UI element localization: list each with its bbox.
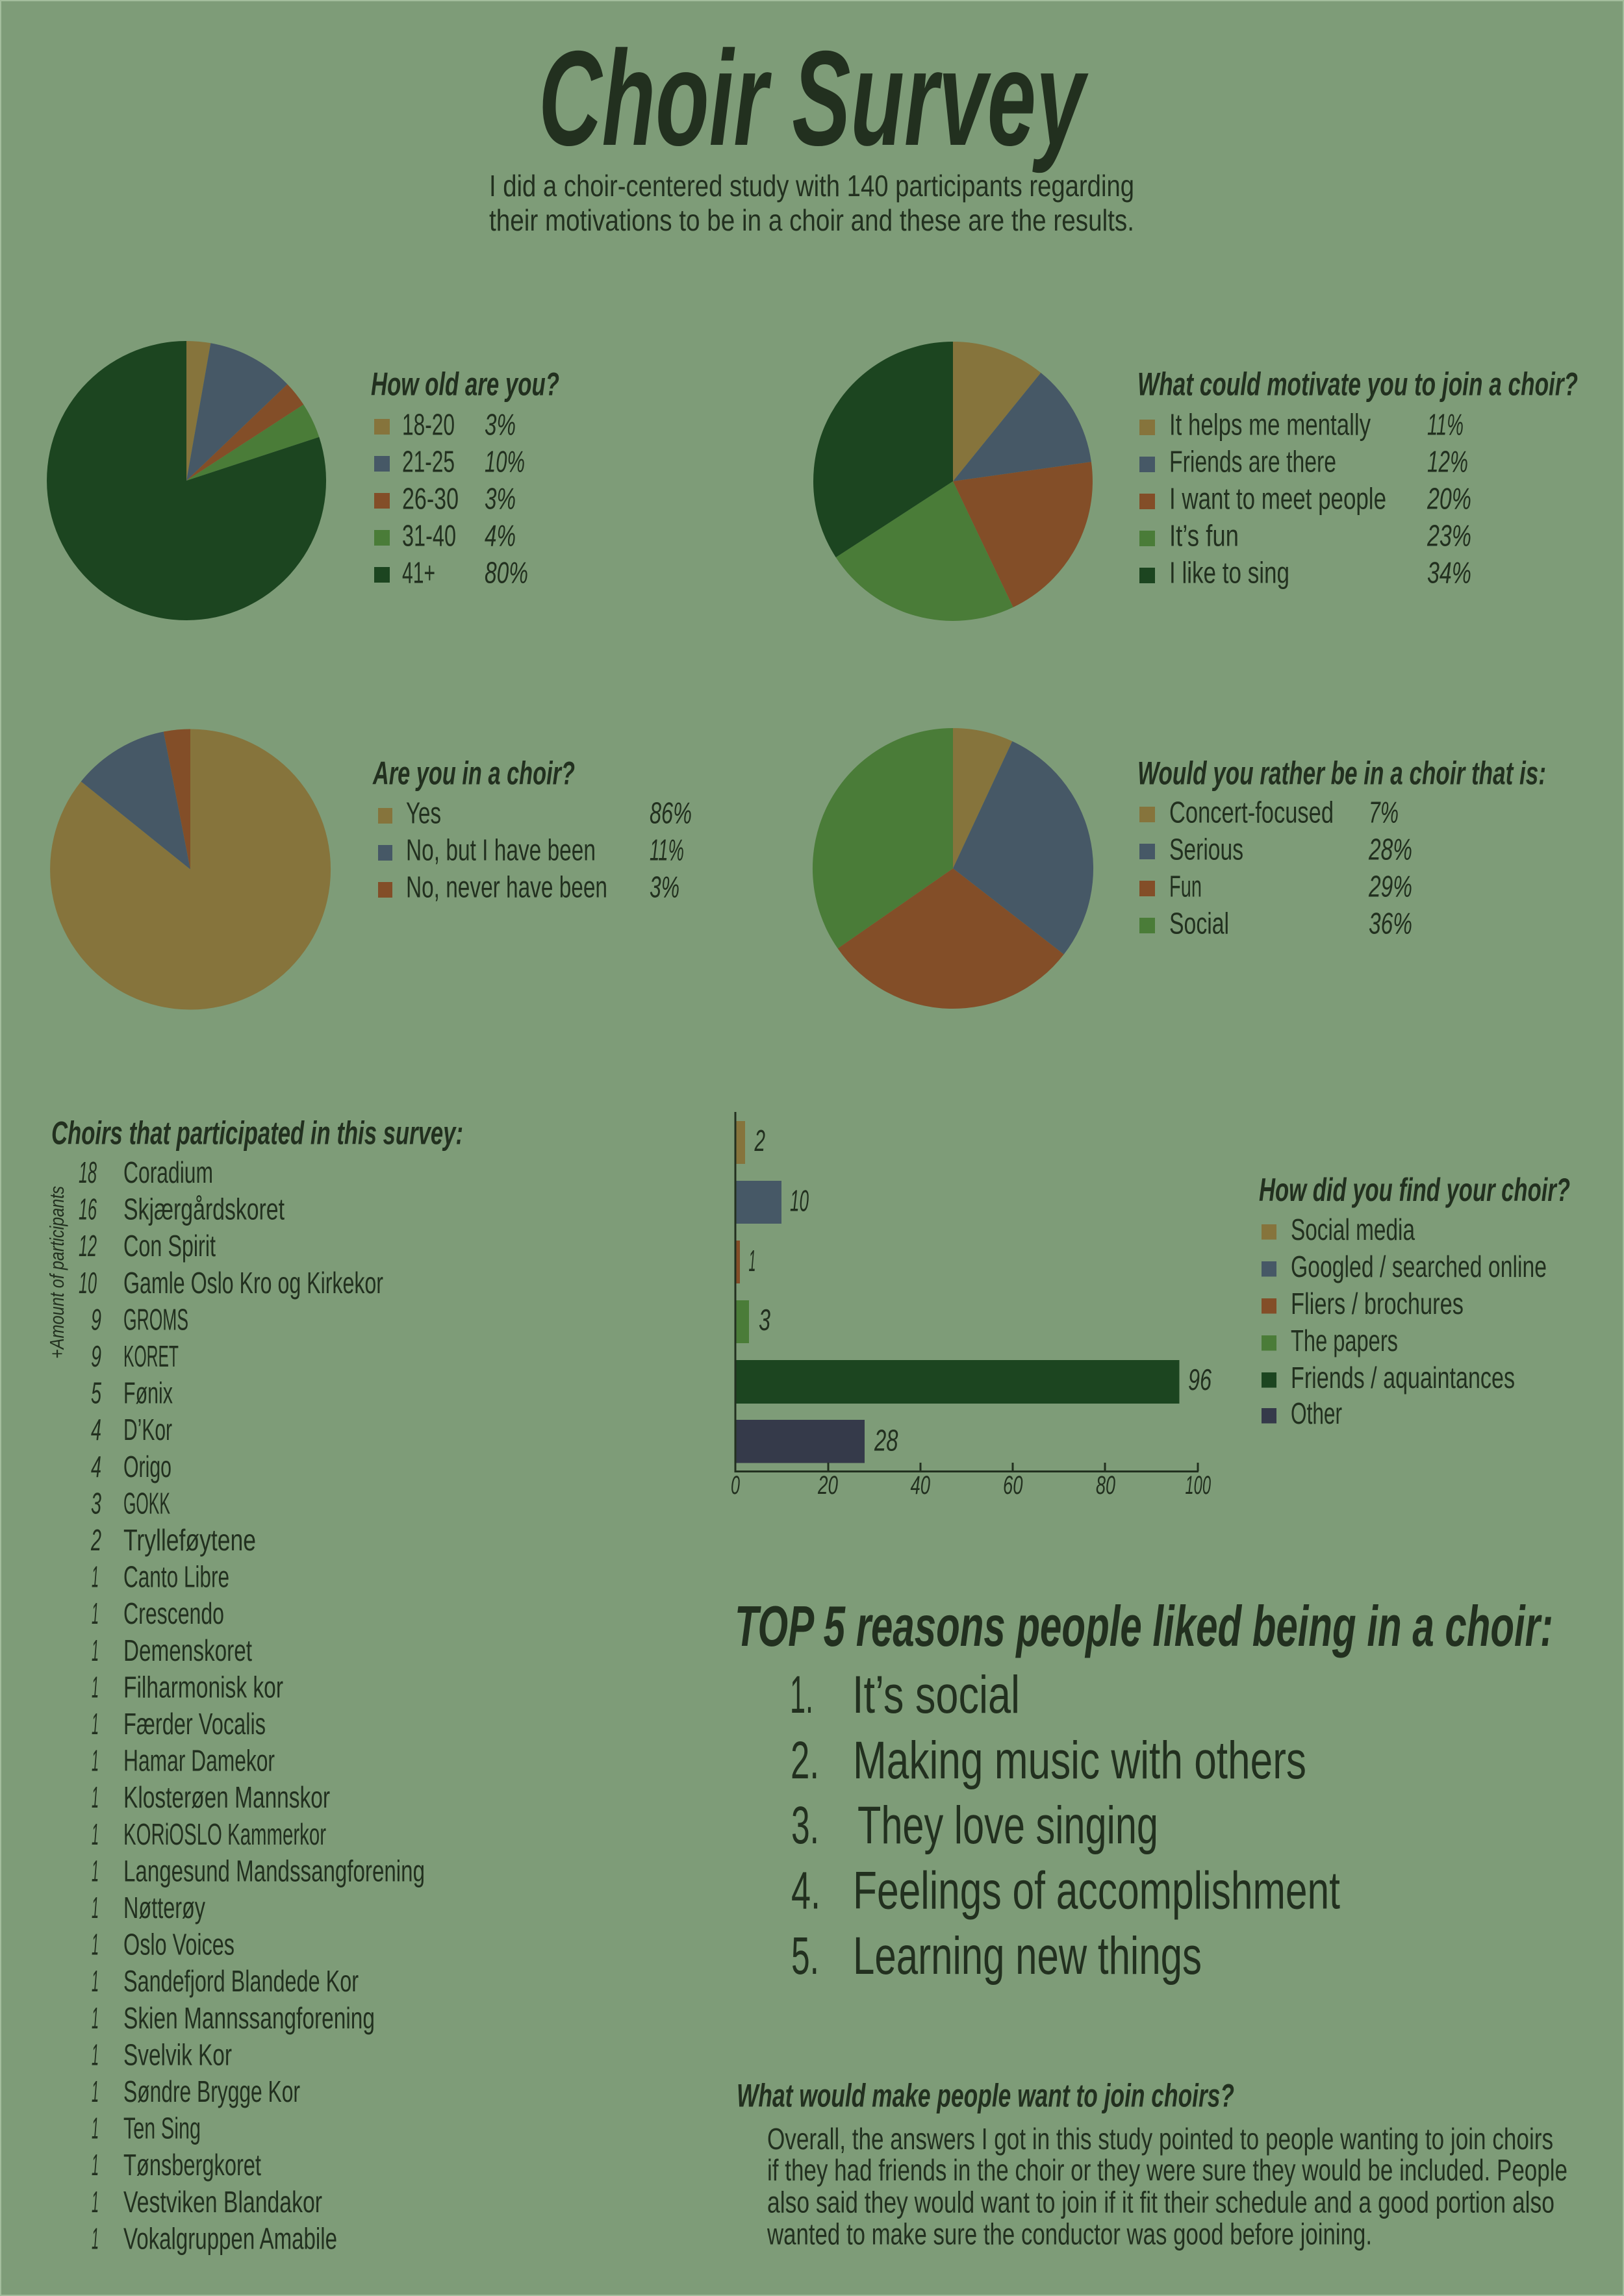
choir list: Crescendo <box>123 1596 224 1630</box>
choir list: 10 <box>79 1266 97 1300</box>
panel: in a choir legend: 86% <box>650 796 692 830</box>
bar chart: how did you find your choir: 0 <box>731 1471 740 1500</box>
panel: in a choir legend <box>372 755 692 904</box>
choir list: Svelvik Kor <box>123 2037 232 2071</box>
panel: choir type legend: Social <box>1169 907 1229 940</box>
choir list: 1 <box>92 1780 99 1814</box>
choir list: Gamle Oslo Kro og Kirkekor <box>123 1266 383 1300</box>
choir list: KORiOSLO Kammerkor <box>123 1817 326 1851</box>
choir list: 1 <box>92 2112 99 2145</box>
panel: age legend: 3% <box>485 408 516 442</box>
reasons list: Feelings of accomplishment <box>853 1861 1340 1920</box>
panel: age legend: 26-30 <box>402 482 459 516</box>
panel: choir type legend <box>1137 755 1546 940</box>
choir list: Canto Libre <box>123 1560 229 1594</box>
choir list: 3 <box>91 1486 101 1520</box>
panel: in a choir legend: 11% <box>650 833 684 866</box>
choir list: 9 <box>91 1339 101 1373</box>
choir list: 1 <box>92 2037 99 2071</box>
panel: age legend <box>371 366 559 590</box>
choir list: Con Spirit <box>123 1229 216 1263</box>
title: Choir Survey <box>539 23 1089 174</box>
choir list: 1 <box>92 1707 99 1741</box>
reasons list: Making music with others <box>853 1731 1306 1790</box>
choir list: 1 <box>92 1744 99 1778</box>
panel: participating choirs <box>45 1115 463 2255</box>
choir list: Tønsbergkoret <box>123 2148 261 2182</box>
choir list: Klosterøen Mannskor <box>123 1780 330 1814</box>
reasons list: Learning new things <box>853 1926 1202 1986</box>
panel: choir type legend: 7% <box>1369 795 1399 829</box>
choir list: Fønix <box>123 1376 173 1410</box>
reasons list: 3. <box>791 1796 819 1855</box>
panel: find your choir legend: Friends / aquaintances <box>1291 1361 1515 1394</box>
panel: choir type pie chart <box>813 728 1093 1009</box>
panel: age legend: How old are you? <box>371 366 559 403</box>
panel: in a choir legend: Are you in a choir? <box>372 755 575 791</box>
panel: choir type legend: Concert-focused <box>1169 795 1334 829</box>
choir list: Oslo Voices <box>123 1928 235 1962</box>
choir list: 2 <box>90 1523 101 1557</box>
panel: choir type legend: 36% <box>1369 907 1412 940</box>
choir list: 1 <box>92 2148 99 2182</box>
panel: choir type legend: 28% <box>1368 833 1412 866</box>
panel: age legend: 4% <box>485 518 516 552</box>
panel: motivation legend: 12% <box>1427 444 1468 478</box>
choir list: D’Kor <box>123 1413 172 1446</box>
body text: wanted to make sure the conductor was good before joining. <box>767 2217 1372 2251</box>
reasons list: 2. <box>791 1731 819 1790</box>
panel: in a choir legend: No, never have been <box>406 870 607 904</box>
choir list: KORET <box>123 1339 179 1373</box>
panel: in a choir legend: No, but I have been <box>406 833 596 866</box>
choir list: Origo <box>123 1450 171 1483</box>
choir list: 1 <box>92 2001 99 2035</box>
choir list: 1 <box>92 2075 99 2108</box>
panel: age legend: 21-25 <box>402 444 455 478</box>
choir list: Demenskoret <box>123 1634 252 1667</box>
choir list: 5 <box>91 1376 101 1410</box>
choir list: Færder Vocalis <box>123 1707 266 1741</box>
panel: age legend: 10% <box>485 444 525 478</box>
bar chart: how did you find your choir: 40 <box>911 1471 930 1500</box>
choir list: 1 <box>92 1928 99 1962</box>
choir list: 1 <box>92 2185 99 2219</box>
choir list: 1 <box>92 1817 99 1851</box>
intro text: their motivations to be in a choir and these are the results. <box>489 203 1134 237</box>
body text <box>767 2122 1567 2251</box>
panel: what would make people join <box>737 2077 1567 2251</box>
panel: motivation pie chart <box>813 342 1093 621</box>
panel: age pie chart <box>47 341 326 620</box>
bar chart: how did you find your choir: 60 <box>1003 1471 1022 1500</box>
panel: motivation legend: Friends are there <box>1169 444 1336 478</box>
panel: find your choir legend: Social media <box>1291 1213 1415 1246</box>
panel: motivation legend: It helps me mentally <box>1169 408 1371 442</box>
choir list: 18 <box>79 1155 97 1189</box>
choir list: 1 <box>92 1560 99 1594</box>
choir list: GOKK <box>123 1486 170 1520</box>
panel: find your choir legend <box>1259 1172 1570 1430</box>
choir list: 1 <box>92 1854 99 1887</box>
choir list: 1 <box>92 1670 99 1704</box>
panel: age legend: 80% <box>485 556 528 590</box>
choir list: Nøtterøy <box>123 1891 205 1924</box>
choir list: 1 <box>92 1964 99 1998</box>
bar chart: how did you find your choir: 96 <box>1188 1363 1212 1396</box>
panel: motivation legend: 23% <box>1427 518 1471 552</box>
choir list: Sandefjord Blandede Kor <box>123 1964 359 1998</box>
choir list: Vestviken Blandakor <box>123 2185 322 2219</box>
choir list: Søndre Brygge Kor <box>123 2075 300 2108</box>
choir list: Hamar Damekor <box>123 1744 275 1778</box>
panel: motivation legend: 34% <box>1427 556 1471 590</box>
bar chart: how did you find your choir: 20 <box>817 1471 838 1500</box>
intro text: I did a choir-centered study with 140 participants regarding <box>489 169 1134 203</box>
choir list: 4 <box>91 1413 101 1446</box>
panel: age legend: 3% <box>485 482 516 516</box>
choir list: Skjærgårdskoret <box>123 1192 285 1226</box>
choir list: Trylleføytene <box>123 1523 256 1557</box>
reasons list: 4. <box>791 1861 820 1920</box>
panel: in a choir legend: Yes <box>406 796 441 830</box>
choir list: 16 <box>79 1192 97 1226</box>
panel: in a choir pie chart <box>50 729 331 1009</box>
panel: age legend: 41+ <box>402 556 435 590</box>
panel: find your choir legend: Fliers / brochures <box>1291 1287 1464 1320</box>
choir list: Vokalgruppen Amabile <box>123 2221 337 2255</box>
reasons list: 5. <box>791 1926 819 1986</box>
choir list: Langesund Mandssangforening <box>123 1854 425 1887</box>
panel: motivation legend: 20% <box>1427 482 1471 516</box>
bar chart: how did you find your choir: 2 <box>754 1124 765 1157</box>
panel: choir type legend: Fun <box>1169 869 1202 903</box>
panel: choir type legend: Serious <box>1169 833 1243 866</box>
bar chart: how did you find your choir: 3 <box>759 1303 770 1337</box>
choir list: 1 <box>92 1891 99 1924</box>
bar chart: how did you find your choir: 10 <box>790 1183 809 1217</box>
choir list: 9 <box>91 1302 101 1336</box>
panel: motivation legend: I want to meet people <box>1169 482 1386 516</box>
reasons list: 1. <box>790 1665 813 1724</box>
bar chart: how did you find your choir: 28 <box>874 1424 898 1457</box>
reasons list: They love singing <box>857 1796 1158 1855</box>
choir list: 1 <box>92 1596 99 1630</box>
panel: motivation legend <box>1137 366 1578 590</box>
panel: find your choir legend: Other <box>1291 1396 1342 1430</box>
axis label: amount of participants: +Amount of participants <box>45 1186 68 1359</box>
choir list: Ten Sing <box>123 2112 201 2145</box>
panel: age legend: 18-20 <box>402 408 455 442</box>
panel: age legend: 31-40 <box>402 518 456 552</box>
choir list: Skien Mannssangforening <box>123 2001 375 2035</box>
bar chart: how did you find your choir: 80 <box>1096 1471 1115 1500</box>
bar chart: how did you find your choir <box>731 1112 1212 1500</box>
panel: motivation legend: It’s fun <box>1169 518 1239 552</box>
panel: motivation legend: I like to sing <box>1169 556 1289 590</box>
bar chart: how did you find your choir: 1 <box>748 1244 756 1278</box>
heading: choirs: Choirs that participated in this survey: <box>51 1115 463 1151</box>
bar chart: how did you find your choir: 100 <box>1185 1471 1211 1500</box>
choir list: Filharmonisk kor <box>123 1670 283 1704</box>
choir list: 1 <box>92 1634 99 1667</box>
panel: motivation legend: 11% <box>1427 408 1464 442</box>
reasons list <box>790 1665 1340 1986</box>
panel: in a choir legend: 3% <box>650 870 679 904</box>
intro text <box>489 169 1134 237</box>
choir list: 1 <box>92 2221 99 2255</box>
choir list: 12 <box>79 1229 97 1263</box>
choir list: Coradium <box>123 1155 213 1189</box>
choir list: GROMS <box>123 1302 188 1336</box>
panel: top 5 reasons <box>735 1594 1553 1986</box>
panel: choir type legend: 29% <box>1368 869 1412 903</box>
heading: join choirs: What would make people want to join choirs? <box>737 2077 1234 2113</box>
choir list: 4 <box>91 1450 101 1483</box>
panel: find your choir legend: The papers <box>1291 1324 1398 1357</box>
choir list <box>79 1155 425 2255</box>
reasons list: It’s social <box>852 1665 1020 1724</box>
